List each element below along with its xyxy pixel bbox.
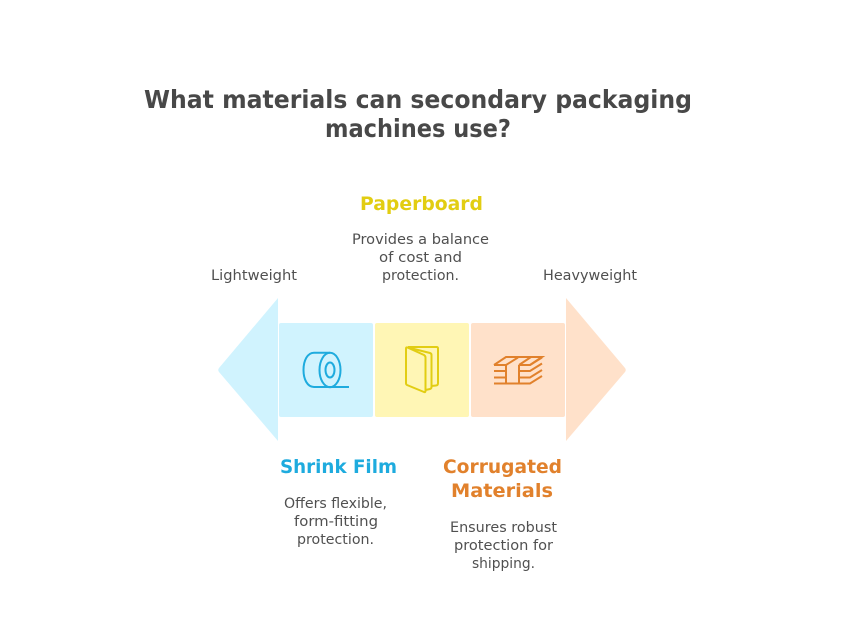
icon: corrugated stack: [494, 357, 542, 384]
text block: Paperboard: Paperboard: [360, 193, 483, 215]
text block: Paperboard: [352, 193, 489, 284]
title: [144, 85, 692, 143]
text block: Shrink Film: protection.: [297, 532, 374, 548]
text block: Shrink Film: Shrink Film: [280, 456, 397, 478]
text block: Paperboard: of cost and: [379, 250, 462, 266]
icon: film roll: [304, 353, 349, 387]
left arrow: [218, 298, 278, 441]
right arrow: [566, 298, 626, 441]
panel: corrugated materials: [471, 323, 565, 417]
text block: Corrugated Materials: protection for: [454, 538, 553, 554]
label: Heavyweight: Heavyweight: [543, 268, 638, 284]
title: machines use?: [325, 114, 511, 143]
text block: Corrugated Materials: Ensures robust: [450, 520, 558, 536]
text block: Shrink Film: [280, 456, 397, 548]
panel: shrink film: [279, 323, 373, 417]
title: What materials can secondary packaging: [144, 85, 692, 114]
text block: Corrugated Materials: Corrugated: [443, 456, 562, 478]
text block: Shrink Film: form-fitting: [294, 514, 378, 530]
text block: Paperboard: protection.: [382, 268, 459, 284]
text block: Corrugated Materials: [443, 456, 562, 572]
text block: Corrugated Materials: shipping.: [472, 556, 535, 572]
panel: paperboard: [375, 323, 469, 417]
label: Lightweight: Lightweight: [211, 268, 298, 284]
icon: folded board: [406, 347, 438, 392]
text block: Shrink Film: Offers flexible,: [284, 496, 387, 512]
text block: Corrugated Materials: Materials: [451, 480, 553, 502]
text block: Paperboard: Provides a balance: [352, 232, 489, 248]
